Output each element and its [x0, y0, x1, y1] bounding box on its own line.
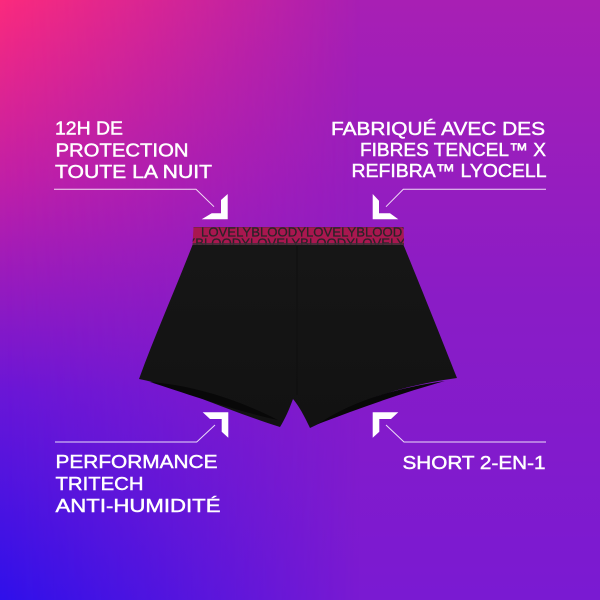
- callout: top right: [331, 118, 546, 219]
- heading: performance tritech: [56, 451, 220, 516]
- heading: 12h de protection: 12H DE: [55, 118, 123, 138]
- heading: fabriqué avec des fibres: FIBRES TENCEL™ X: [360, 139, 546, 160]
- bracket arrow: [373, 194, 398, 219]
- heading: performance tritech: PERFORMANCE: [56, 451, 218, 472]
- heading: performance tritech: ANTI-HUMIDITÉ: [56, 495, 220, 516]
- waistband: [192, 227, 404, 245]
- bracket arrow: [202, 194, 228, 219]
- bracket arrow: [373, 412, 398, 438]
- bracket arrow: [203, 412, 228, 438]
- leader line: [386, 425, 546, 442]
- heading: 12h de protection: TOUTE LA NUIT: [55, 161, 212, 182]
- heading: fabriqué avec des fibres: FABRIQUÉ AVEC DES: [331, 118, 545, 139]
- shorts product image: [139, 224, 460, 428]
- heading: performance tritech: TRITECH: [56, 473, 144, 494]
- centre seam: [296, 246, 298, 395]
- leader line: [386, 189, 546, 207]
- callout: bottom left: [55, 412, 228, 516]
- heading: fabriqué avec des fibres: [331, 118, 546, 181]
- callout: bottom right: [373, 412, 546, 473]
- heading: short 2-en-1: SHORT 2-EN-1: [402, 452, 546, 473]
- shorts body: [139, 245, 457, 428]
- heading: fabriqué avec des fibres: REFIBRA™ LYOCELL: [352, 160, 546, 181]
- leader line: [55, 425, 215, 442]
- hem shading: [150, 381, 445, 424]
- leader line: [54, 189, 214, 207]
- heading: 12h de protection: [55, 118, 212, 182]
- callout: top left: [54, 118, 228, 219]
- waistband text: LOVELYBLOODYLOVELYBLOODY: [201, 224, 411, 240]
- waistband: LOVELYBLOODYLOVELYBLOODYLOVELYBLOODY: [145, 236, 460, 250]
- heading: 12h de protection: PROTECTION: [56, 140, 188, 160]
